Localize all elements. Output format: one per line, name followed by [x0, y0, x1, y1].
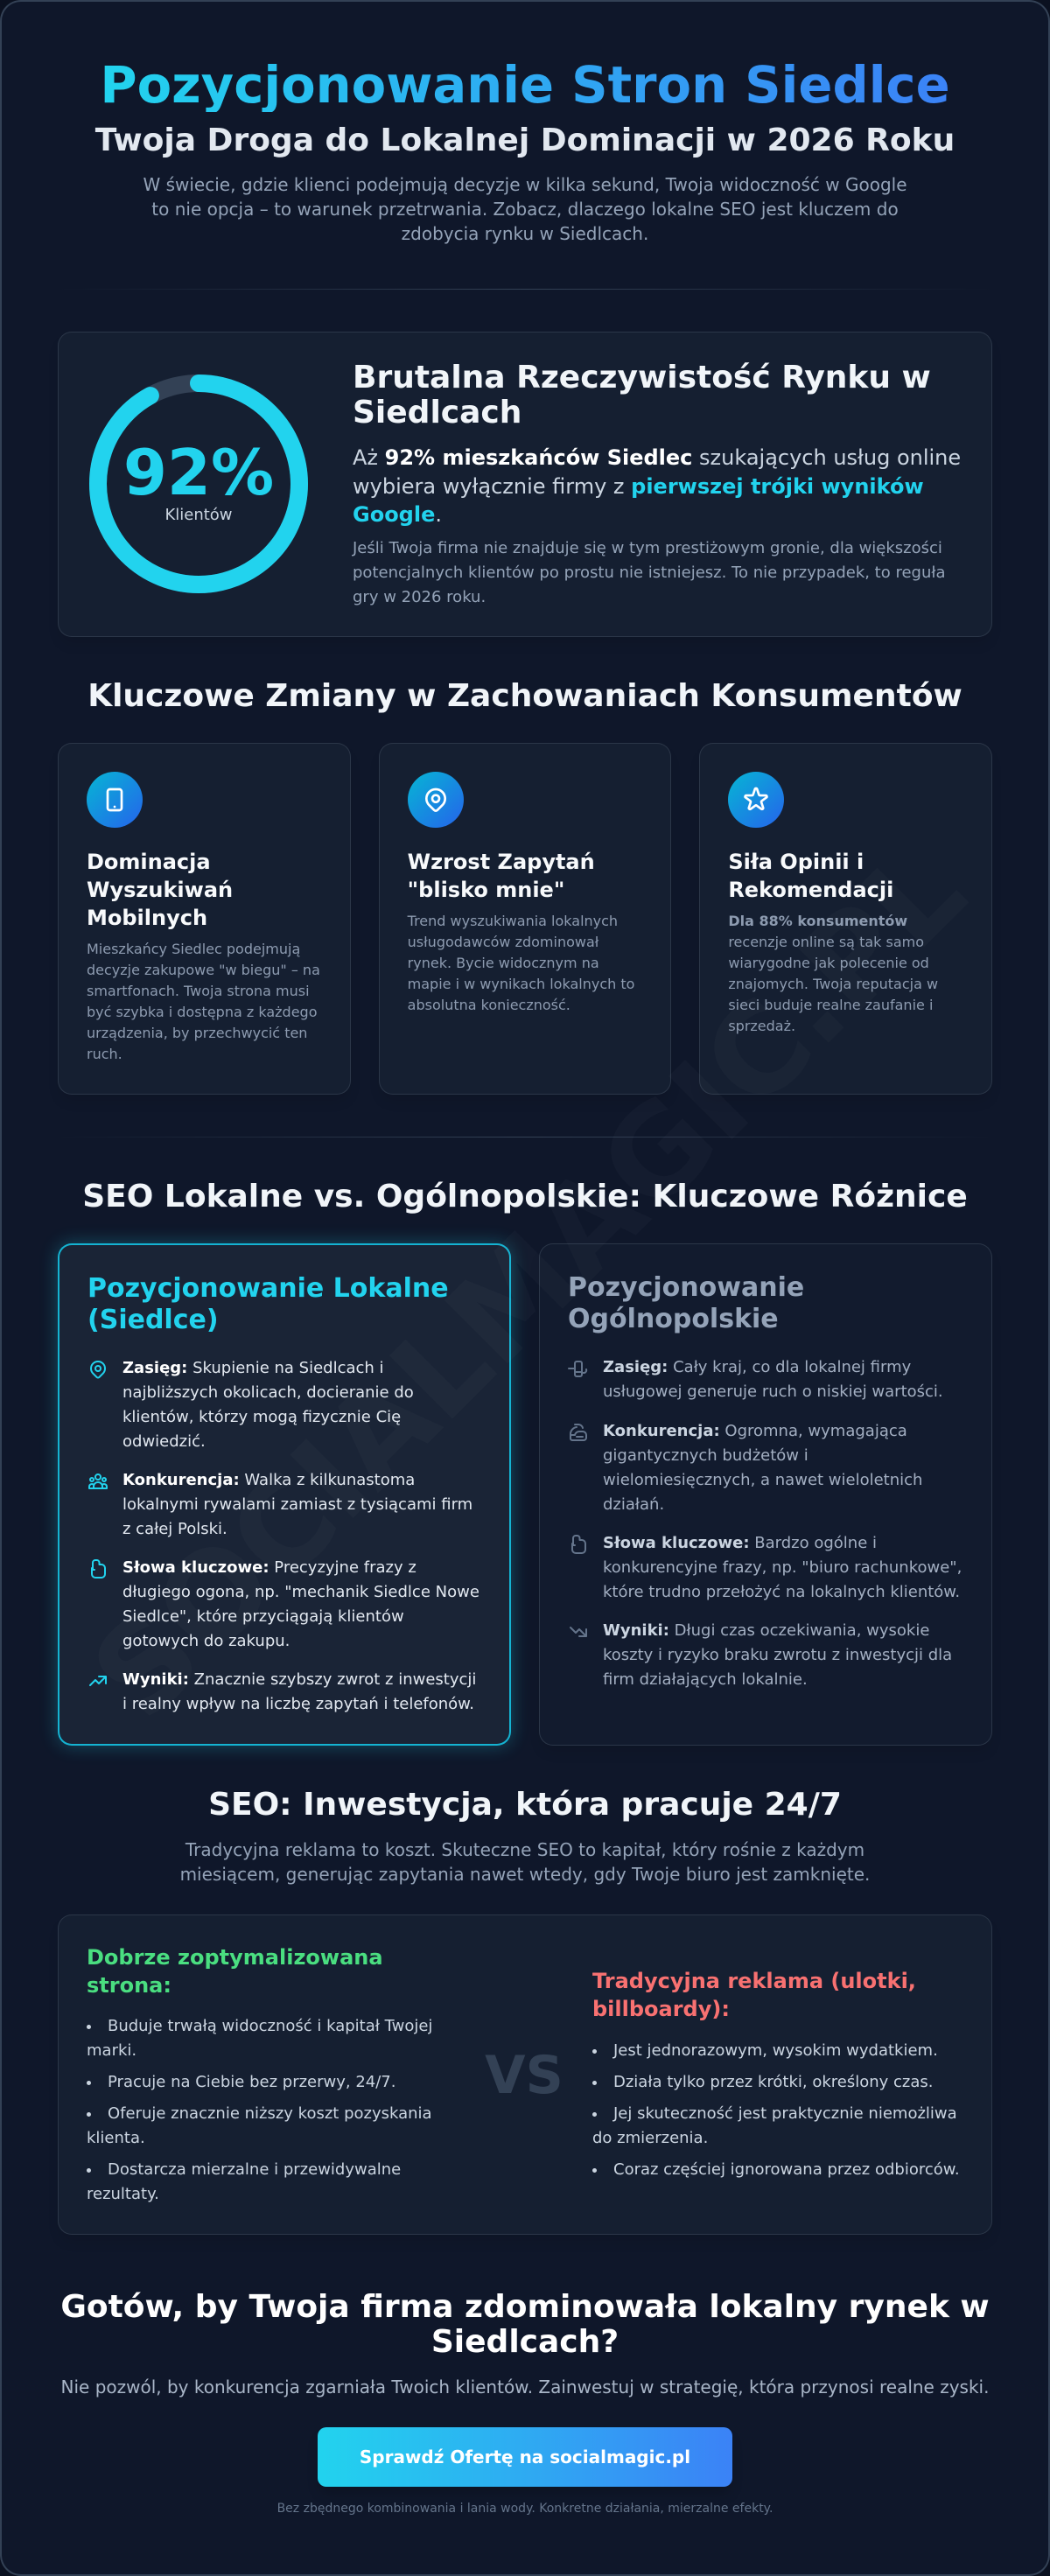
- subtitle: Twoja Droga do Lokalnej Dominacji w 2026 Roku: [95, 122, 955, 158]
- card text: wiarygodne jak polecenie od: [728, 955, 929, 971]
- card text: mapie i w wynikach lokalnych to: [408, 976, 634, 992]
- list: website benefits: Buduje trwałą widoczność i kapitał Twojej: [108, 2017, 432, 2035]
- card text: [408, 913, 634, 1013]
- text: key statistic: [353, 445, 961, 527]
- heading: consumer changes: Kluczowe Zmiany w Zachowaniach Konsumentów: [88, 678, 962, 714]
- title: Pozycjonowanie Stron Siedlce: [100, 56, 950, 115]
- item: results: [570, 1620, 952, 1689]
- intro text: W świecie, gdzie klienci podejmują decyzje w kilka sekund, Twoja widoczność w Google: [143, 174, 907, 195]
- heading: investment: SEO: Inwestycja, która pracuje 24/7: [208, 1787, 842, 1823]
- card text: Mieszkańcy Siedlec podejmują: [87, 941, 300, 957]
- panel heading: [568, 1272, 804, 1334]
- item: reach: usługowej generuje ruch o niskiej wartości.: [603, 1382, 943, 1401]
- intro text: to nie opcja – to warunek przetrwania. Zobacz, dlaczego lokalne SEO jest kluczem do: [151, 199, 899, 220]
- item: reach: klientów, którzy mogą fizycznie Cię: [122, 1408, 401, 1426]
- item: reach: [90, 1359, 414, 1451]
- heading: market reality: Siedlcach: [353, 395, 522, 430]
- panel heading: (Siedlce): [88, 1305, 219, 1335]
- card heading: [87, 850, 233, 930]
- column heading: traditional ads: billboardy):: [592, 1997, 730, 2021]
- item: results: i realny wpływ na liczbę zapytań i telefonów.: [122, 1695, 474, 1713]
- item: results: [89, 1670, 476, 1713]
- column heading: traditional ads: [592, 1969, 916, 2021]
- panel: mobile search: [58, 743, 351, 1095]
- item: keywords: konkurencyjne frazy, np. "biuro rachunkowe",: [603, 1558, 962, 1577]
- chart: 92% donut: 92%: [123, 436, 274, 509]
- item: keywords: Słowa kluczowe: Precyzyjne frazy z: [122, 1558, 416, 1577]
- card text: Dla 88% konsumentów: [728, 913, 907, 929]
- list: website benefits: klienta.: [87, 2129, 145, 2147]
- text: key statistic: Google.: [353, 502, 442, 527]
- list: traditional ads drawbacks: Coraz częściej ignorowana przez odbiorców.: [613, 2160, 960, 2179]
- item: competition: działań.: [603, 1494, 664, 1514]
- heading: call to action: [60, 2289, 990, 2360]
- text: call to action: Nie pozwól, by konkurencja zgarniała Twoich klientów. Zainwestuj w strategię, która przynosi realne zyski.: [61, 2376, 989, 2398]
- button: [318, 2427, 732, 2487]
- card text: Trend wyszukiwania lokalnych: [408, 913, 618, 929]
- item: reach: najbliższych okolicach, docieranie do: [122, 1383, 414, 1402]
- card text: sprzedaż.: [728, 1018, 795, 1034]
- item: keywords: [91, 1558, 480, 1650]
- heading: call to action: Gotów, by Twoja firma zdominowała lokalny rynek w: [60, 2289, 990, 2325]
- card heading: [408, 850, 595, 902]
- card text: absolutna konieczność.: [408, 997, 570, 1013]
- item: competition: [570, 1421, 922, 1514]
- text: explanation: [352, 539, 946, 606]
- heading: local vs national: SEO Lokalne vs. Ogólnopolskie: Kluczowe Różnice: [82, 1179, 968, 1214]
- item: results: firm działających lokalnie.: [603, 1670, 808, 1689]
- card text: decyzje zakupowe "w biegu" – na: [87, 962, 320, 978]
- list: website benefits: rezultaty.: [87, 2185, 159, 2203]
- text: key statistic: wybiera wyłącznie firmy z pierwszej trójki wyników: [353, 474, 924, 499]
- list: website benefits: Pracuje na Ciebie bez przerwy, 24/7.: [108, 2073, 396, 2091]
- column heading: website: Dobrze zoptymalizowana: [87, 1945, 383, 1970]
- card text: smartfonach. Twoja strona musi: [87, 983, 310, 999]
- card heading: Wzrost Zapytań: [408, 850, 595, 874]
- card heading: [728, 850, 893, 902]
- text: explanation: gry w 2026 roku.: [353, 588, 486, 606]
- card heading: Wyszukiwań: [87, 878, 233, 902]
- panel: near me queries: [379, 743, 671, 1095]
- infographic page: SOCIALMAGIC.PL: [66, 820, 992, 1746]
- card text: [87, 941, 320, 1062]
- list: traditional ads drawbacks: Jest jednorazowym, wysokim wydatkiem.: [613, 2041, 938, 2060]
- list: website benefits: [87, 2017, 432, 2203]
- column heading: traditional ads: Tradycyjna reklama (ulotki,: [592, 1969, 916, 1993]
- panel: market reality: [58, 332, 992, 637]
- item: results: Wyniki: Znacznie szybszy zwrot z inwestycji: [122, 1670, 476, 1689]
- icon: phone: [87, 772, 143, 828]
- text: explanation: potencjalnych klientów po prostu nie istniejesz. To nie przypadek, to reguła: [353, 564, 946, 581]
- text: investment intro: miesiącem, generując zapytania nawet wtedy, gdy Twoje biuro jest zamknięte.: [180, 1864, 870, 1885]
- item: competition: Konkurencja: Walka z kilkunastoma: [122, 1471, 415, 1489]
- icon: star: [728, 772, 784, 828]
- item: competition: lokalnymi rywalami zamiast z tysiącami firm: [122, 1495, 472, 1514]
- item: competition: wielomiesięcznych, a nawet wieloletnich: [603, 1470, 922, 1489]
- item: results: koszty i ryzyko braku zwrotu z inwestycji dla: [603, 1645, 952, 1664]
- chart: 92% donut: [89, 374, 308, 593]
- card heading: Mobilnych: [87, 906, 207, 930]
- card heading: "blisko mnie": [408, 878, 564, 902]
- text: explanation: Jeśli Twoja firma nie znajduje się w tym prestiżowym gronie, dla większości: [353, 539, 942, 556]
- list: website benefits: marki.: [87, 2041, 136, 2060]
- card text: rynek. Bycie widocznym na: [408, 955, 599, 971]
- item: reach: Zasięg: Skupienie na Siedlcach i: [122, 1359, 384, 1377]
- chart: 92% donut: Klientów: [164, 506, 233, 524]
- card text: znajomych. Twoja reputacja w: [728, 976, 938, 992]
- list: traditional ads drawbacks: Działa tylko przez krótki, określony czas.: [613, 2073, 933, 2091]
- heading: call to action: Siedlcach?: [431, 2324, 619, 2360]
- icon: map pin: [408, 772, 464, 828]
- column heading: website: strona:: [87, 1973, 172, 1998]
- card text: sieci buduje realne zaufanie i: [728, 997, 933, 1013]
- item: keywords: Słowa kluczowe: Bardzo ogólne i: [603, 1533, 877, 1552]
- heading: market reality: Brutalna Rzeczywistość Rynku w: [353, 360, 931, 396]
- card text: ruch.: [87, 1046, 122, 1062]
- item: reach: [568, 1358, 943, 1401]
- panel heading: [88, 1273, 449, 1335]
- card text: recenzje online są tak samo: [728, 934, 924, 950]
- text: key statistic: Aż 92% mieszkańców Siedlec szukających usług online: [353, 445, 961, 470]
- panel: national SEO: [539, 1243, 992, 1746]
- item: keywords: długiego ogona, np. "mechanik Siedlce Nowe: [122, 1583, 480, 1601]
- panel: local SEO: [58, 1243, 511, 1746]
- vs label: VS: [485, 2045, 564, 2106]
- panel heading: Ogólnopolskie: [568, 1304, 779, 1334]
- list: website benefits: Dostarcza mierzalne i przewidywalne: [108, 2160, 401, 2179]
- list: website benefits: Oferuje znacznie niższy koszt pozyskania: [108, 2104, 432, 2123]
- item: reach: Zasięg: Cały kraj, co dla lokalnej firmy: [603, 1358, 911, 1376]
- intro text: [143, 174, 907, 244]
- item: results: Wyniki: Długi czas oczekiwania, wysokie: [603, 1620, 929, 1640]
- panel: reviews: [699, 743, 992, 1095]
- card text: być szybka i dostępna z każdego: [87, 1004, 317, 1020]
- card heading: Rekomendacji: [728, 878, 893, 902]
- footnote: Bez zbędnego kombinowania i lania wody. Konkretne działania, mierzalne efekty.: [277, 2502, 773, 2516]
- item: keywords: [571, 1533, 962, 1601]
- item: competition: [88, 1471, 472, 1538]
- item: keywords: które trudno przełożyć na lokalnych klientów.: [603, 1582, 960, 1601]
- text: investment intro: Tradycyjna reklama to koszt. Skuteczne SEO to kapitał, który rośnie z każdym: [186, 1839, 864, 1860]
- text: investment intro: [180, 1839, 870, 1885]
- list: traditional ads drawbacks: [592, 2041, 960, 2179]
- card heading: Siła Opinii i: [728, 850, 864, 874]
- button: Sprawdź Ofertę na socialmagic.pl: [360, 2446, 690, 2468]
- item: competition: Konkurencja: Ogromna, wymagająca: [603, 1421, 907, 1440]
- card text: [728, 913, 938, 1034]
- item: keywords: gotowych do zakupu.: [122, 1632, 290, 1650]
- column heading: website: [87, 1945, 383, 1998]
- card text: usługodawców zdominował: [408, 934, 598, 950]
- card heading: Dominacja: [87, 850, 211, 874]
- card text: urządzenia, by przechwycić ten: [87, 1025, 307, 1041]
- panel: SEO vs traditional advertising: [58, 1914, 992, 2235]
- panel heading: Pozycjonowanie Lokalne: [88, 1273, 449, 1304]
- item: reach: odwiedzić.: [122, 1432, 206, 1451]
- list: traditional ads drawbacks: Jej skuteczność jest praktycznie niemożliwa: [613, 2104, 957, 2123]
- list: traditional ads drawbacks: do zmierzenia.: [592, 2129, 708, 2147]
- heading: market reality: [353, 360, 931, 430]
- item: keywords: Siedlce", które przyciągają klientów: [122, 1607, 404, 1626]
- item: competition: gigantycznych budżetów i: [603, 1446, 808, 1465]
- intro text: zdobycia rynku w Siedlcach.: [402, 223, 648, 244]
- panel heading: Pozycjonowanie: [568, 1272, 804, 1303]
- item: competition: z całej Polski.: [122, 1520, 228, 1538]
